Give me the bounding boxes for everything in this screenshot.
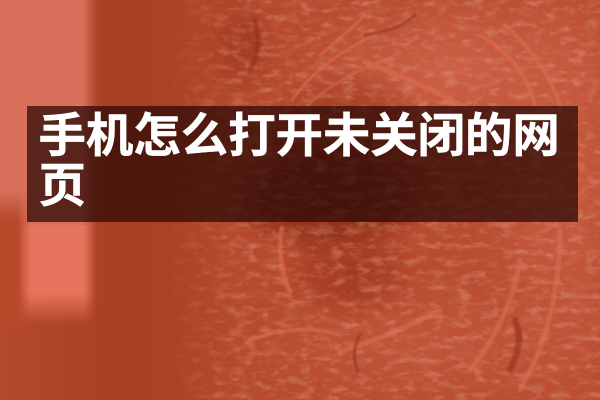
background: pale area lower left: [20, 225, 95, 320]
background: pale sky area upper left: [0, 0, 100, 225]
background: orange left edge: [0, 194, 28, 320]
background: bark texture: [181, 0, 600, 400]
title: 手机怎么打开未关闭的网页: [38, 110, 560, 213]
title banner: [27, 106, 578, 222]
